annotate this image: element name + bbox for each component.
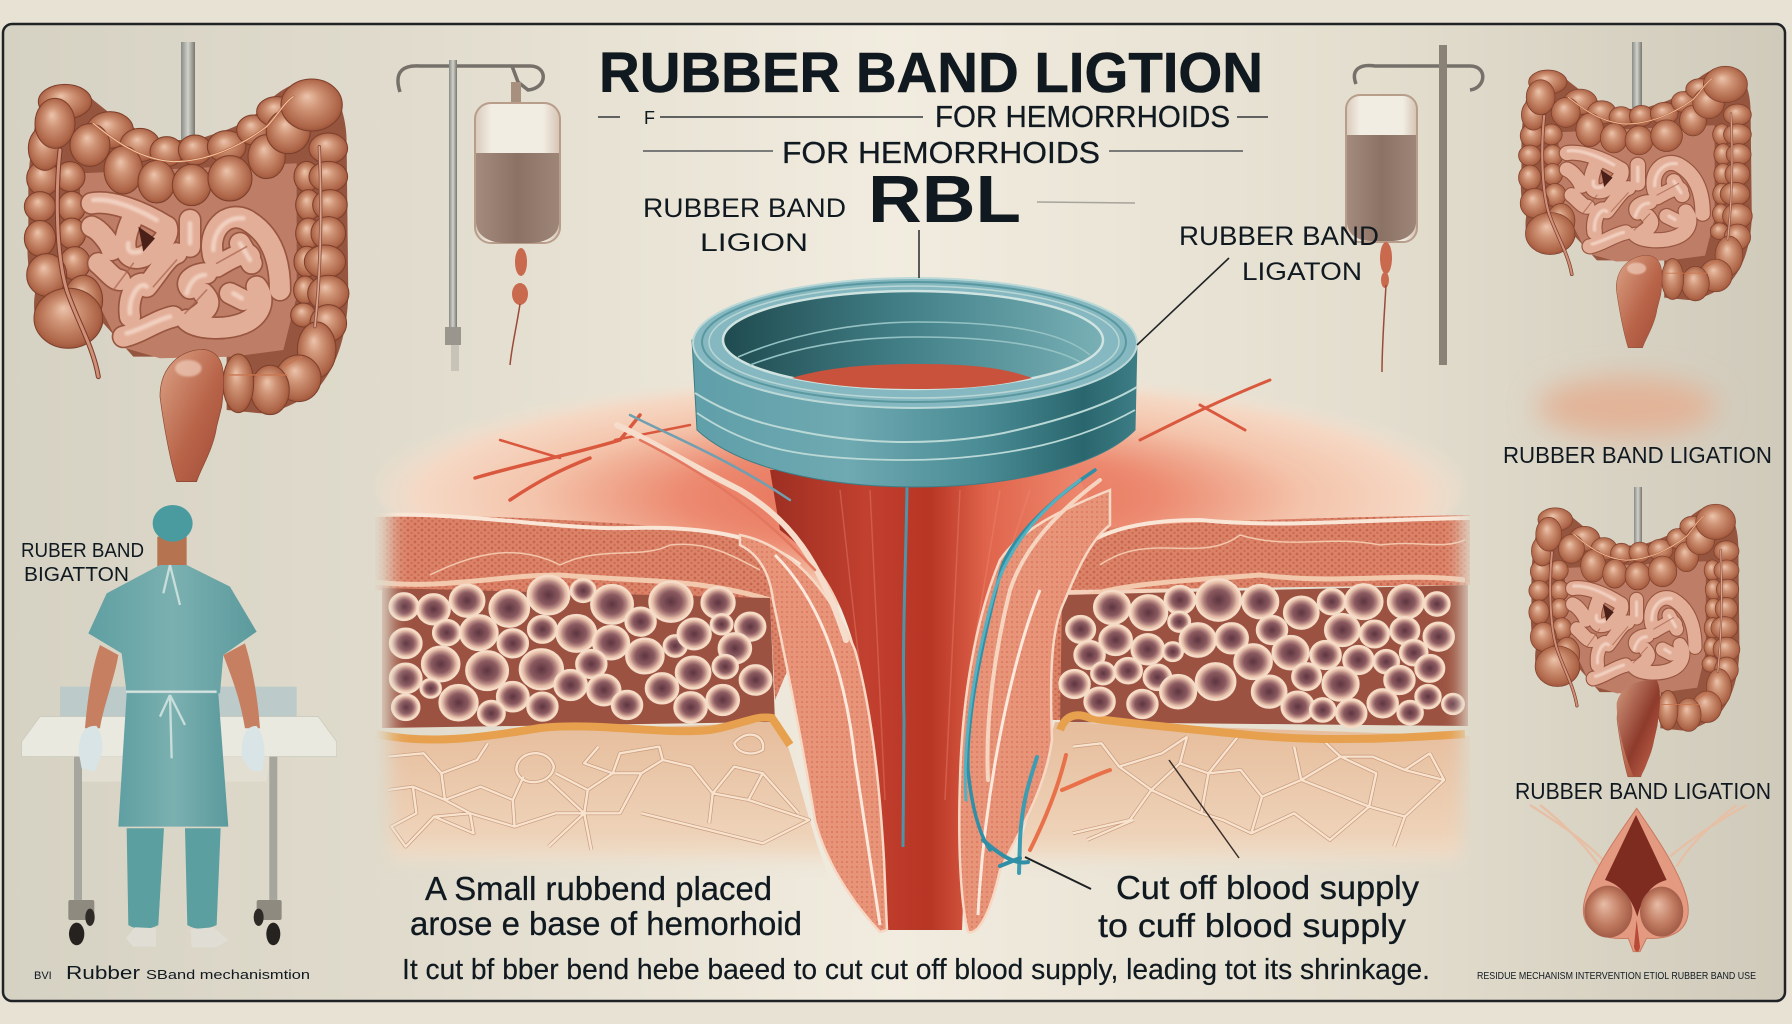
label: rubber band ligation left of RBL <box>643 193 846 257</box>
label: surgeon rubber band ligation <box>21 540 144 586</box>
text block: blood supply <box>1098 869 1420 944</box>
text block: band placement: arose e base of hemorhoid <box>410 905 802 942</box>
side tissue blocks <box>375 515 1470 880</box>
subtitle: second for hemorrhoids row: FOR HEMORRHOIDS <box>782 135 1100 170</box>
subtitle: first for hemorrhoids row <box>598 99 1268 134</box>
surgeon figure <box>78 505 264 947</box>
red vessels <box>475 380 1270 500</box>
fat layers <box>375 722 830 880</box>
table <box>22 687 337 945</box>
tubes right <box>1060 579 1464 727</box>
central blue vessel <box>903 487 907 847</box>
text block: band placement: A Small rubbend placed <box>425 870 772 907</box>
text block: blood supply: to cuff blood supply <box>1098 907 1407 944</box>
faint rule beside RBL <box>1037 202 1135 203</box>
caption: lower left rubber band note: Rubber <box>66 963 140 983</box>
icon: left intestines <box>24 42 349 482</box>
caption: lower left rubber band note: SBand mechanismtion <box>146 967 310 982</box>
diagram: hemorrhoid tissue cross-section <box>375 363 1470 932</box>
text block: bottom description: It cut bf bber bend hebe baeed to cut cut off blood supply, leading tot its shrinkage. <box>402 954 1430 986</box>
central canal <box>770 470 1090 930</box>
caption: lower left rubber band note <box>34 963 310 983</box>
tube layers <box>382 588 775 728</box>
orange boundary lines <box>376 717 790 745</box>
caption: lower left rubber band note: BVI <box>34 970 52 982</box>
label: rubber band ligation right callout: LIGATON <box>1242 258 1362 286</box>
label: rubber band ligation left of RBL: LIGION <box>700 229 808 257</box>
right dermis <box>1040 515 1470 720</box>
subtitle: first for hemorrhoids row: FOR HEMORRHOIDS <box>935 99 1230 134</box>
label: rubber band ligation left of RBL: RUBBER BAND <box>643 193 846 223</box>
text block: blood supply: Cut off blood supply <box>1116 869 1420 906</box>
label: surgeon rubber band ligation: BIGATTON <box>24 564 129 586</box>
heading: RBL: RBL <box>868 162 1021 237</box>
tubes left <box>390 576 771 726</box>
icon: right lower intestines <box>1529 487 1740 777</box>
right canal wall <box>959 490 1110 932</box>
label: surgeon rubber band ligation: RUBER BAND <box>21 540 144 562</box>
title: RUBBER BAND LIGTION <box>599 41 1263 105</box>
icon: hemorrhoid cross-section <box>1530 805 1747 952</box>
left canal wall <box>740 535 887 932</box>
tissue mound around band <box>375 363 1465 607</box>
callout line: RBL to band <box>918 230 920 278</box>
panel: surgeon at table <box>22 505 337 947</box>
left dermis <box>375 515 800 700</box>
callout line: tissue pointer <box>1169 760 1239 858</box>
text block: band placement <box>410 870 802 942</box>
soft skin tone patch <box>1537 377 1717 437</box>
panel: left IV stand with bag <box>398 60 560 371</box>
label: right upper rubber band ligation: RUBBER BAND LIGATION <box>1503 442 1772 468</box>
caption: lower right fine print: RESIDUE MECHANISM INTERVENTION ETIOL RUBBER BAND USE <box>1477 971 1756 982</box>
callout line: right label to band <box>1137 258 1229 345</box>
left pale vessel bundle <box>617 415 846 640</box>
callout line: blood supply to vessel <box>1025 857 1091 889</box>
label: right lower rubber band ligation: RUBBER BAND LIGATION <box>1515 778 1771 804</box>
icon: right upper intestines <box>1519 42 1752 348</box>
panel: right IV stand with bag <box>1346 45 1483 372</box>
rubber band ring <box>692 278 1137 487</box>
label: rubber band ligation right callout <box>1179 221 1379 286</box>
subtitle: first for hemorrhoids row: F <box>644 108 655 128</box>
right vessel bundle <box>965 470 1110 873</box>
label: rubber band ligation right callout: RUBBER BAND <box>1179 221 1379 251</box>
